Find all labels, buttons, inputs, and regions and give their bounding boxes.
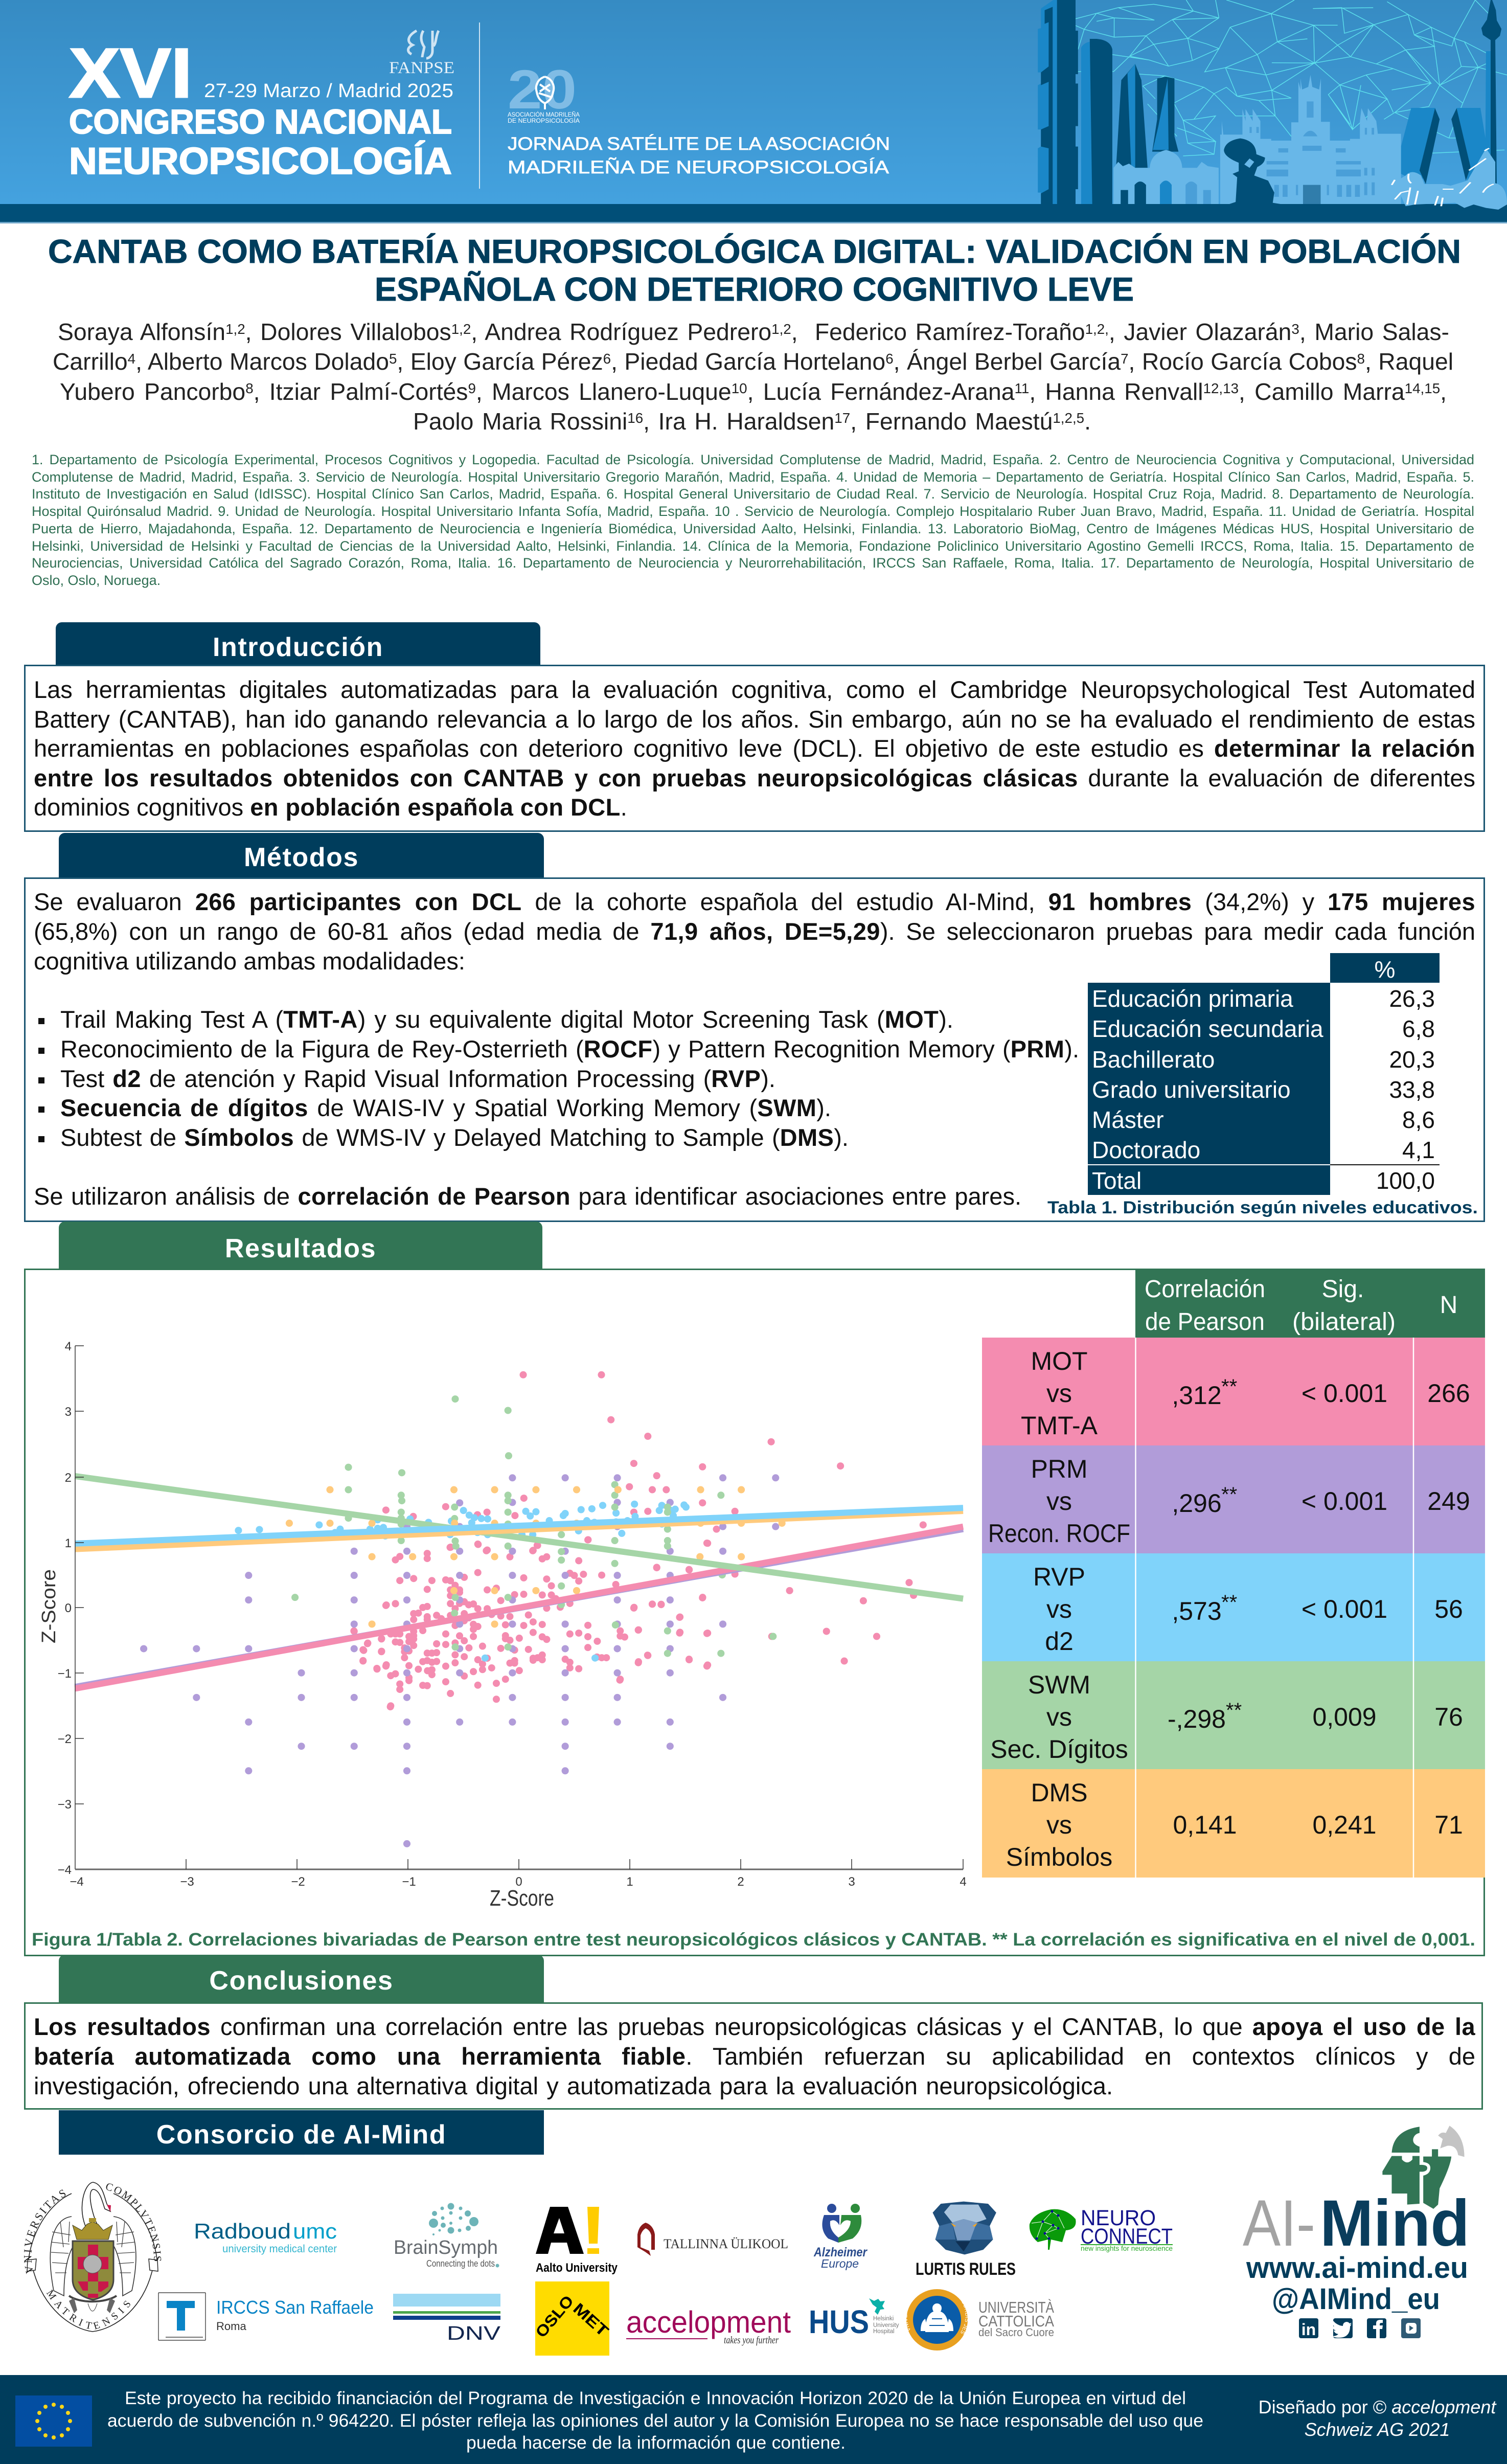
design credit: Schweiz AG 2021: [1305, 2419, 1450, 2440]
scatter plot: 3: [848, 1875, 855, 1889]
logo: Universidad Complutense crest: VNIVERSITAS: [24, 2189, 65, 2274]
table 2: correlations: [982, 1269, 1485, 1878]
orange points: DMS vs Símbolos: [289, 1490, 782, 1624]
affiliations: Oslo, Oslo, Noruega.: [32, 573, 161, 588]
row: MOT vs TMT-A: [1021, 1347, 1470, 1440]
axis tick labels: −4: [58, 1863, 72, 1877]
logo: Alzheimer Europe: Europe: [821, 2257, 859, 2270]
row: SWM vs Sec. Dígitos: **: [1226, 1699, 1242, 1722]
congress title: 27-29 Marzo / Madrid 2025: [204, 80, 453, 102]
logo: HUS: [809, 2298, 899, 2340]
affiliations: [32, 452, 1474, 588]
axis tick labels: −3: [58, 1798, 72, 1812]
table 1: education levels: Grado universitario: [1092, 1076, 1291, 1103]
table 1: education levels: Bachillerato: [1092, 1046, 1215, 1073]
logo: BrainSymph: [394, 2203, 499, 2269]
axis tick labels: 1: [65, 1536, 72, 1550]
scatter plot: 1: [626, 1875, 633, 1889]
row: SWM vs Sec. Dígitos: 0,009: [1312, 1703, 1377, 1731]
logo: AI-Mind puzzle head: Mind: [1320, 2187, 1470, 2260]
main title: CANTAB COMO BATERÍA NEUROPSICOLÓGICA DIGITAL: VALIDACIÓN EN POBLACIÓN: [48, 233, 1461, 270]
table 1: education levels: Total: [1092, 1167, 1141, 1194]
intro text: Las herramientas digitales automatizadas para la evaluación cognitiva, como el Cambridge Neuropsychological Test Automated: [34, 676, 1475, 703]
table 1: education levels: %: [1375, 956, 1395, 983]
panel: métodos: [24, 877, 1485, 1222]
scatter plot: [38, 1340, 967, 1911]
row: SWM vs Sec. Dígitos: [990, 1670, 1463, 1764]
Pearson analysis sentence: Se utilizaron análisis de correlación de Pearson para identificar asociaciones entre pares.: [34, 1183, 1021, 1210]
conclusions text: batería automatizada como una herramienta fiable. También refuerzan su aplicabilidad en contextos clínicos y de: [34, 2043, 1475, 2070]
main title: [48, 233, 1461, 308]
row: MOT vs TMT-A: MOT: [1031, 1347, 1088, 1375]
logo: accelopment: takes you further: [724, 2335, 779, 2346]
design credit: Diseñado por © accelopment: [1259, 2397, 1496, 2417]
logo: Neuroconnect: [1030, 2206, 1173, 2252]
row: PRM vs Recon. ROCF: Recon. ROCF: [988, 1519, 1130, 1548]
row: SWM vs Sec. Dígitos: vs: [1046, 1703, 1072, 1731]
funding statement: acuerdo de subvención n.º 964220. El póster refleja las opiniones del autor y la Comisión Europea no se hace responsable del uso que: [107, 2410, 1203, 2431]
test list: Trail Making Test A (TMT-A) y su equivalente digital Motor Screening Task (MOT).: [60, 1006, 953, 1033]
table 1: education levels: 6,8: [1402, 1015, 1435, 1042]
axis tick labels: 4: [65, 1340, 72, 1353]
logo: BrainSymph: BrainSymph: [394, 2237, 498, 2258]
affiliations: Instituto de Investigación en Salud (IdISSC). Hospital Clínico San Carlos, Madrid, España. 6. Hospital General Universitario de Ciudad Real. 7. Servicio de Neurología. Hospital Cruz Roja, Madrid. 8. Departamento de Neurología.: [32, 486, 1474, 502]
authors: Carrillo4, Alberto Marcos Dolado5, Eloy García Pérez6, Piedad García Hortelano6, Ángel Berbel García7, Rocío García Cobos8, Raquel: [53, 348, 1453, 375]
satellite session title: JORNADA SATÉLITE DE LA ASOCIACIÓN: [508, 134, 890, 154]
heading: Consorcio de AI-Mind: [59, 2110, 544, 2155]
table 1: education levels: 20,3: [1389, 1046, 1435, 1073]
logo: Universidad Complutense crest: [24, 2182, 162, 2332]
row: RVP vs d2: [1033, 1563, 1463, 1656]
logo: BrainSymph: Connecting the dots: [426, 2258, 495, 2269]
logo: OsloMet: MET: [569, 2299, 612, 2340]
logo: Neuroconnect: new insights for neuroscience: [1081, 2244, 1173, 2252]
website: www.ai-mind.eu: [1246, 2251, 1468, 2285]
purple points: PRM vs ROCF: [144, 1478, 775, 1844]
KIO towers and Torrespaña: [1485, 51, 1491, 188]
table 1: education levels: [1088, 953, 1440, 1195]
methods text: (65,8%) con un rango de 60-81 años (edad media de 71,9 años, DE=5,29). Se seleccionaron pruebas para medir cada función: [34, 918, 1475, 945]
row: DMS vs Símbolos: vs: [1046, 1811, 1072, 1839]
figure caption: Figura 1/Tabla 2. Correlaciones bivariadas de Pearson entre test neuropsicológicos clásicos y CANTAB. ** La correlación es significativa en el nivel de 0,001.: [32, 1930, 1475, 1950]
logo: Aalto University: [536, 2207, 618, 2275]
header banner: [0, 0, 1507, 223]
Alcalá gate: [1113, 150, 1219, 204]
logo: Neuroconnect: NEURO: [1081, 2206, 1156, 2230]
heading: Métodos: [59, 833, 544, 877]
affiliations: Complutense de Madrid, Madrid, España. 3. Servicio de Neurología. Hospital Universitario Gregorio Marañón, Madrid, España. 4. Unidad de Memoria – Departamento de Geriatría. Hospital Clínico San Carlos, Madrid, España. 5.: [32, 469, 1474, 485]
table header: Correlación: [1145, 1276, 1265, 1303]
methods text: Se evaluaron 266 participantes con DCL de la cohorte española del estudio AI-Mind, 91 hombres (34,2%) y 175 mujeres: [34, 888, 1475, 915]
methods text: [34, 888, 1475, 975]
logo: HUS: Hospital: [873, 2329, 895, 2335]
logo: Radboudumc: university medical center: [222, 2243, 337, 2255]
row: PRM vs Recon. ROCF: **: [1221, 1483, 1237, 1506]
logo: OsloMet: OSLO: [532, 2292, 577, 2341]
table header: [1145, 1276, 1457, 1336]
intro text: Battery (CANTAB), han ido ganando relevancia a lo largo de los años. Sin embargo, aún no se ha evaluado el rendimiento de estas: [34, 706, 1475, 732]
row: PRM vs Recon. ROCF: vs: [1046, 1487, 1072, 1516]
heading: Introducción: [56, 622, 540, 665]
panel: introducción: [24, 665, 1485, 832]
heading: Conclusiones: [59, 1955, 544, 2002]
logo: Università Cattolica: CATTOLICA: [978, 2312, 1054, 2330]
row: DMS vs Símbolos: 0,241: [1312, 1811, 1377, 1839]
row: RVP vs d2: 56: [1434, 1595, 1463, 1623]
y axis label: Z-Score: [38, 1569, 60, 1643]
conclusions text: [34, 2013, 1475, 2099]
logo: Radboudumc: umc: [293, 2219, 337, 2243]
table header: Sig.: [1322, 1276, 1364, 1303]
logo: Radboudumc: Radboud: [194, 2219, 291, 2243]
congress title: [69, 34, 453, 182]
association 20 years logo: DE NEUROPSICOLOGÍA: [508, 117, 580, 124]
table 1: education levels: Máster: [1092, 1106, 1164, 1133]
scatter plot: −3: [180, 1875, 194, 1889]
row: PRM vs Recon. ROCF: ,296: [1172, 1489, 1222, 1518]
row: DMS vs Símbolos: 71: [1434, 1811, 1463, 1839]
heading: Introducción: Introducción: [213, 632, 383, 662]
authors: [53, 319, 1453, 435]
skyline of Madrid: [1038, 0, 1507, 210]
logo: Aalto University: Aalto University: [536, 2261, 618, 2275]
row: SWM vs Sec. Dígitos: 76: [1434, 1703, 1463, 1731]
blue points: RVP vs d2: [238, 1504, 686, 1658]
heading: Métodos: Métodos: [244, 843, 359, 872]
scatter plot: 4: [960, 1875, 967, 1889]
panel: resultados: [24, 1269, 1485, 1956]
logo: Università Cattolica: UNIVERSITÀ: [978, 2298, 1054, 2316]
row: PRM vs Recon. ROCF: [988, 1455, 1470, 1548]
main title: ESPAÑOLA CON DETERIORO COGNITIVO LEVE: [375, 270, 1134, 308]
test list: Test d2 de atención y Rapid Visual Information Processing (RVP).: [60, 1065, 775, 1092]
logo: Università Cattolica: [906, 2289, 1054, 2350]
regression lines: [75, 1476, 963, 1688]
Cibeles palace: [1220, 75, 1401, 204]
association 20 years logo: ASOCIACIÓN MADRILEÑA: [508, 110, 580, 118]
intro text: herramientas en poblaciones españolas con deterioro cognitivo leve (DCL). El objetivo de este estudio es determinar la relación: [34, 735, 1475, 762]
row: RVP vs d2: vs: [1046, 1595, 1072, 1623]
funding statement: Este proyecto ha recibido financiación del Programa de Investigación e Innovación Horizon 2020 de la Unión Europea en virtud del: [125, 2388, 1186, 2408]
heading: Conclusiones: Conclusiones: [209, 1966, 394, 1996]
row: MOT vs TMT-A: TMT-A: [1021, 1411, 1098, 1440]
logo: DNV: DNV: [447, 2323, 501, 2344]
row: RVP vs d2: RVP: [1033, 1563, 1085, 1591]
pink points: MOT vs TMT-A: [354, 1375, 923, 1707]
satellite session title: MADRILEÑA DE NEUROPSICOLOGÍA: [508, 157, 889, 177]
logo: accelopment: accelopment: [626, 2305, 791, 2339]
axes: [75, 1346, 963, 1869]
satellite session title: [508, 134, 890, 177]
row: DMS vs Símbolos: DMS: [1031, 1778, 1088, 1807]
results chart and table: [32, 1270, 1485, 1950]
row: MOT vs TMT-A: ,312: [1172, 1381, 1222, 1410]
logo: Universidad Complutense crest: COMPLVTENSIS: [106, 2183, 162, 2261]
row: SWM vs Sec. Dígitos: Sec. Dígitos: [990, 1735, 1128, 1764]
table 1: education levels: 8,6: [1402, 1106, 1435, 1133]
affiliations: Hospital Quirónsalud Madrid. 9. Unidad de Neurología. Hospital Universitario Infanta Sofía, Madrid, España. 10 . Servicio de Neurología. Complejo Hospitalario Ruber Juan Bravo, Madrid, España. 11. Unidad de Geriatría. Hospital: [32, 504, 1474, 519]
association 20 years logo: 20: [508, 58, 577, 120]
table header: (bilateral): [1292, 1308, 1396, 1336]
table 1: education levels: 4,1: [1402, 1137, 1435, 1163]
Cibeles fountain: [1391, 148, 1507, 210]
logo: IRCCS San Raffaele: [158, 2293, 374, 2340]
table 1: education levels: 33,8: [1389, 1076, 1435, 1103]
row: RVP vs d2: ,573: [1172, 1597, 1222, 1625]
axis tick labels: [58, 1340, 72, 1877]
social icons: [1299, 2318, 1421, 2339]
conclusions text: investigación, ofreciendo una alternativa digital y automatizada para la evaluación neuropsicológica.: [34, 2072, 1113, 2099]
scatter plot: −1: [402, 1875, 416, 1889]
green points: SWM vs Dígitos: [295, 1399, 773, 1654]
logo: Alzheimer Europe: Alzheimer: [813, 2245, 867, 2259]
logo: OsloMet: [532, 2281, 612, 2356]
congress title: NEUROPSICOLOGÍA: [69, 141, 452, 182]
scatter plot: −4: [70, 1875, 84, 1889]
table 1 caption: Tabla 1. Distribución según niveles educativos.: [1047, 1198, 1478, 1217]
test list: Subtest de Símbolos de WMS-IV y Delayed Matching to Sample (DMS).: [60, 1124, 849, 1151]
logo: DNV: [393, 2294, 501, 2344]
row: SWM vs Sec. Dígitos: -,298: [1168, 1705, 1226, 1733]
icon: EU flag: [15, 2395, 92, 2447]
table header: N: [1440, 1292, 1457, 1319]
axis tick labels: 2: [65, 1471, 72, 1485]
affiliations: Neurociencias, Universidad Católica del Sagrado Corazón, Roma, Italia. 16. Departamento de Neurociencia y Neurorrehabilitación, IRCCS San Raffaele, Roma, Italia. 17. Departamento de Neurología, Hospital Universitario de: [32, 555, 1474, 571]
intro text: entre los resultados obtenidos con CANTAB y con pruebas neuropsicológicas clásicas durante la evaluación de diferentes: [34, 764, 1475, 792]
logo: Neuroconnect: CONNECT: [1081, 2224, 1173, 2249]
row: MOT vs TMT-A: 266: [1427, 1379, 1470, 1408]
FANPSE logo: FANPSE: [389, 59, 454, 77]
row: PRM vs Recon. ROCF: 249: [1427, 1487, 1470, 1516]
logo: IRCCS San Raffaele: IRCCS San Raffaele: [216, 2297, 374, 2318]
row: MOT vs TMT-A: **: [1221, 1375, 1237, 1398]
scatter plot: 2: [737, 1875, 744, 1889]
logo: Tallinna Ülikool: [637, 2223, 788, 2256]
table 1: education levels: Doctorado: [1092, 1137, 1200, 1163]
panel: conclusiones: [24, 2002, 1483, 2110]
heading: Resultados: [59, 1222, 542, 1269]
x axis label: Z-Score: [490, 1886, 554, 1911]
design credit: [1259, 2397, 1497, 2440]
axis tick labels: 0: [65, 1601, 72, 1615]
funding statement: pueda hacerse de la información que contiene.: [466, 2432, 846, 2453]
row: RVP vs d2: **: [1221, 1591, 1237, 1614]
row: RVP vs d2: d2: [1045, 1627, 1074, 1656]
scatter plot: 0: [515, 1875, 522, 1889]
FANPSE logo: [389, 31, 454, 77]
logo: Universidad Complutense crest: MATRITENSIS: [46, 2289, 130, 2330]
row: DMS vs Símbolos: [1006, 1778, 1463, 1871]
twitter handle: @AIMind_eu: [1272, 2282, 1440, 2316]
axis tick labels: −1: [58, 1667, 72, 1681]
logo: AI-Mind puzzle head: [1243, 2126, 1470, 2260]
heading: Resultados: Resultados: [225, 1234, 376, 1263]
congress title: CONGRESO NACIONAL: [69, 103, 452, 141]
table 1: education levels: Educación primaria: [1092, 985, 1293, 1012]
test list: Reconocimiento de la Figura de Rey-Osterrieth (ROCF) y Pattern Recognition Memory (PRM).: [60, 1035, 1079, 1063]
affiliations: Puerta de Hierro, Majadahonda, España. 12. Departamento de Neurociencia e Ingeniería Biomédica, Universidad Aalto, Helsinki, Finlandia. 13. Laboratorio BioMag, Centro de Imágenes Médicas HUS, Hospital Universitario de: [32, 521, 1474, 536]
conclusions text: Los resultados confirman una correlación entre las pruebas neuropsicológicas clásicas y el CANTAB, lo que apoya el uso de la: [34, 2013, 1475, 2040]
logo: Lurtis Rules: LURTIS RULES: [916, 2259, 1016, 2279]
logo: HUS: Helsinki: [873, 2316, 894, 2322]
intro text: dominios cognitivos en población española con DCL.: [34, 794, 627, 821]
logo: IRCCS San Raffaele: Roma: [216, 2320, 246, 2333]
scatter plot: −2: [291, 1875, 305, 1889]
row: DMS vs Símbolos: 0,141: [1173, 1811, 1237, 1839]
row: RVP vs d2: < 0.001: [1302, 1595, 1387, 1623]
row: DMS vs Símbolos: Símbolos: [1006, 1843, 1112, 1871]
table 1: education levels: Educación secundaria: [1092, 1015, 1323, 1042]
social icons: in: [1302, 2320, 1316, 2339]
heading: Consorcio de AI-Mind: Consorcio de AI-Mind: [156, 2120, 446, 2150]
AI-Mind wordmark: AI-: [1243, 2187, 1315, 2260]
logo: Tallinna Ülikool: TALLINNA ÜLIKOOL: [664, 2236, 788, 2251]
row: SWM vs Sec. Dígitos: SWM: [1028, 1670, 1090, 1699]
logo: HUS: HUS: [809, 2303, 869, 2340]
logo: Lurtis Rules: [916, 2202, 1016, 2279]
funding statement: [107, 2388, 1203, 2453]
row: PRM vs Recon. ROCF: < 0.001: [1302, 1487, 1387, 1516]
logo: Alzheimer Europe: [813, 2204, 867, 2270]
affiliations: Helsinki, Universidad de Helsinki y Facultad de Ciencias de la Universidad Aalto, Helsinki, Finlandia. 14. Clínica de la Memoria, Fondazione Policlinico Universitario Agostino Gemelli IRCCS, Roma, Italia. 15. Departamento de: [32, 538, 1474, 554]
footer band: [0, 2375, 1507, 2464]
table 1: education levels: 100,0: [1376, 1167, 1435, 1194]
axis tick labels: −2: [58, 1732, 72, 1746]
consortium logos: [24, 2126, 1470, 2356]
office towers: [1038, 0, 1057, 204]
authors: Soraya Alfonsín1,2, Dolores Villalobos1,2, Andrea Rodríguez Pedrero1,2, Federico Ramírez-Toraño1,2,, Javier Olazarán3, Mario Salas-: [58, 319, 1449, 345]
test list: [38, 1006, 1079, 1151]
table 1: education levels: 26,3: [1389, 985, 1435, 1012]
congress title: XVI: [69, 34, 192, 112]
logo: Radboudumc: [194, 2219, 337, 2255]
row: PRM vs Recon. ROCF: PRM: [1031, 1455, 1088, 1483]
authors: Yubero Pancorbo8, Itziar Palmí-Cortés9, Marcos Llanero-Luque10, Lucía Fernández-Arana11, Hanna Renvall12,13, Camillo Marra14,15,: [60, 378, 1447, 405]
row: MOT vs TMT-A: < 0.001: [1302, 1379, 1387, 1408]
row: MOT vs TMT-A: vs: [1046, 1379, 1072, 1408]
bear and strawberry tree: [1224, 139, 1281, 204]
authors: Paolo Maria Rossini16, Ira H. Haraldsen17, Fernando Maestú1,2,5.: [413, 408, 1091, 435]
logo: HUS: University: [873, 2322, 899, 2329]
table header: de Pearson: [1145, 1308, 1265, 1336]
logo: Università Cattolica: del Sacro Cuore: [978, 2326, 1054, 2339]
affiliations: 1. Departamento de Psicología Experimental, Procesos Cognitivos y Logopedia. Facultad de Psicología. Universidad Complutense de Madrid, Madrid, España. 2. Centro de Neurociencia Cognitiva y Computacional, Universidad: [32, 452, 1474, 467]
test list: Secuencia de dígitos de WAIS-IV y Spatial Working Memory (SWM).: [60, 1094, 831, 1121]
axis tick labels: 3: [65, 1405, 72, 1419]
intro text: [34, 676, 1475, 821]
methods text: cognitiva utilizando ambas modalidades:: [34, 947, 465, 975]
